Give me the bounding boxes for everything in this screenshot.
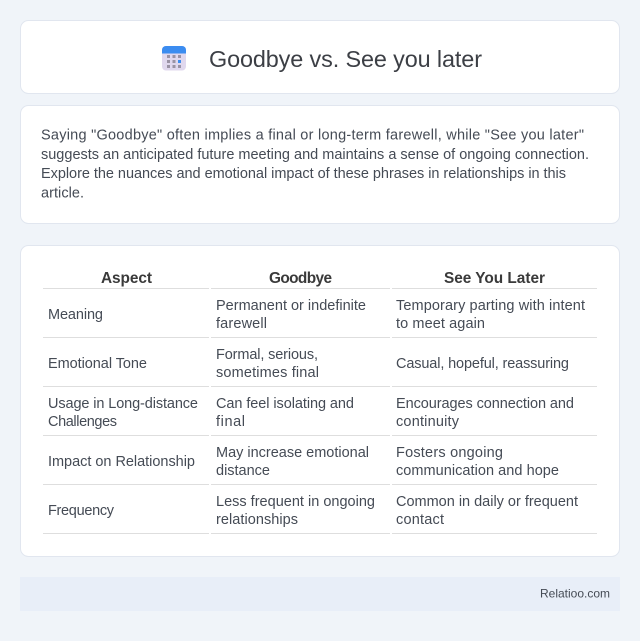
row: emotional tone: Casual, hopeful, reassuring (396, 356, 569, 372)
row: impact on relationship: distance (216, 463, 270, 479)
row: meaning: Temporary parting with intent (396, 298, 585, 314)
panel: introduction (20, 106, 620, 224)
intro text: article. (41, 185, 84, 201)
table header (101, 270, 545, 287)
intro text: Saying "Goodbye" often implies a final or long-term farewell, while "See you later" (41, 128, 584, 144)
row: usage in long-distance challenges: Encourages connection and (396, 396, 574, 412)
row: meaning: farewell (216, 316, 267, 332)
title: Goodbye vs. See you later (209, 46, 482, 72)
row: frequency (48, 494, 578, 528)
table header: Aspect (101, 270, 152, 287)
intro text: Explore the nuances and emotional impact of these phrases in relationships in this (41, 166, 566, 182)
row: frequency: Common in daily or frequent (396, 494, 578, 510)
row: impact on relationship: Impact on Relationship (48, 454, 195, 470)
row: emotional tone (48, 347, 569, 381)
row: usage in long-distance challenges: Can feel isolating and (216, 396, 354, 412)
row: meaning: Permanent or indefinite (216, 298, 366, 314)
panel: comparison table (20, 246, 620, 556)
row: impact on relationship (48, 445, 559, 479)
row: emotional tone: sometimes final (216, 365, 319, 381)
row: emotional tone: Emotional Tone (48, 356, 147, 372)
row: frequency: relationships (216, 512, 298, 528)
row: meaning (48, 298, 585, 332)
row: meaning: to meet again (396, 316, 485, 332)
row: frequency: Less frequent in ongoing (216, 494, 375, 510)
row: meaning: Meaning (48, 307, 103, 323)
intro text: suggests an anticipated future meeting and maintains a sense of ongoing connection. (41, 147, 589, 163)
table header: See You Later (444, 270, 545, 287)
panel: header (20, 20, 620, 94)
row: impact on relationship: May increase emotional (216, 445, 369, 461)
row: usage in long-distance challenges: final (216, 414, 245, 430)
row: impact on relationship: communication and hope (396, 463, 559, 479)
row: usage in long-distance challenges: continuity (396, 414, 460, 430)
row: usage in long-distance challenges (48, 396, 574, 430)
footer text: Relatioo.com (540, 586, 610, 600)
intro text (41, 128, 589, 201)
row: emotional tone: Formal, serious, (216, 347, 318, 363)
table header: Goodbye (269, 270, 332, 287)
row: frequency: contact (396, 512, 444, 528)
row: impact on relationship: Fosters ongoing (396, 445, 503, 461)
row: usage in long-distance challenges: Challenges (48, 414, 117, 430)
row: frequency: Frequency (48, 503, 115, 519)
icon: calendar (162, 46, 186, 70)
footer band (20, 577, 620, 611)
row: usage in long-distance challenges: Usage in Long-distance (48, 396, 198, 412)
